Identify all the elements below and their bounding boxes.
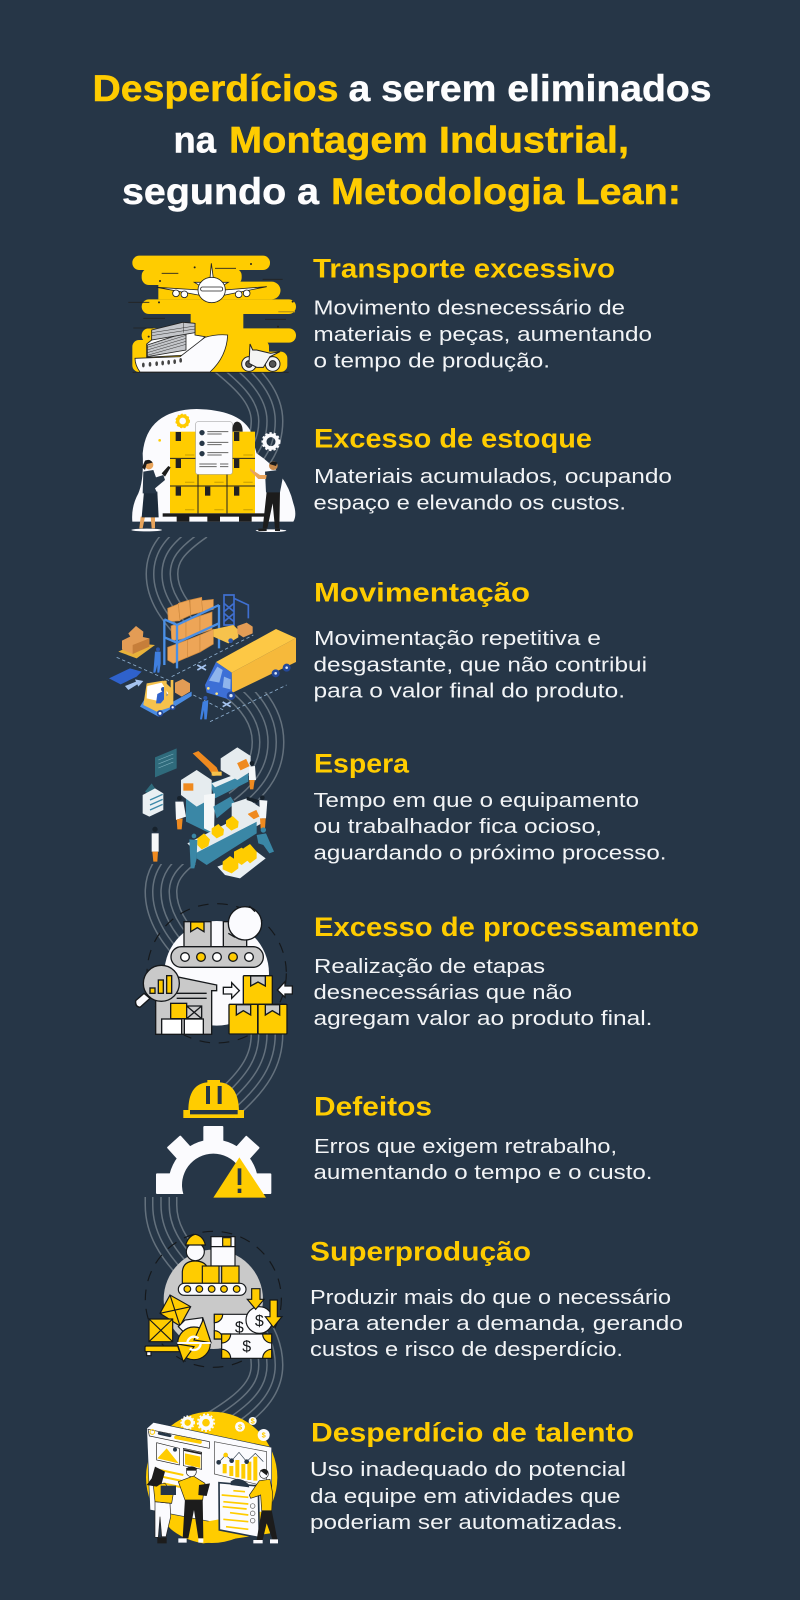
description: custos e risco de desperdício. [310,1338,623,1361]
woman [155,1502,171,1537]
icon: worker, conveyor, crates and money: $ [242,1339,251,1356]
title: segundo a [122,171,319,212]
worker 2 [200,700,208,719]
pallet [163,513,265,517]
description: Uso inadequado do potencial [310,1458,626,1481]
man [250,461,286,532]
description: Movimentação repetitiva e [314,627,601,650]
panel: Superprodução [145,1231,683,1367]
motorcycle [242,344,280,371]
heading: Superprodução [310,1236,531,1266]
title: Metodologia Lean: [331,171,681,212]
description: materiais e peças, aumentando [314,323,652,346]
title: a serem eliminados [348,68,712,109]
infographic canvas [94,74,710,1544]
gears [178,416,188,426]
tall forklift [224,595,248,625]
description [314,1135,652,1184]
title [92,68,712,212]
panel: Movimentação [109,578,647,722]
icon: stacked boxes, checklist and two workers [131,409,295,532]
heading: Espera [314,748,410,778]
icon: helmet, gear and warning triangle [156,1080,271,1198]
description [314,465,672,514]
panel: Espera [143,747,666,878]
panel: Desperdício de talento [146,1412,634,1543]
recycle arrows [177,1319,211,1362]
woman [131,460,171,531]
left machine [186,795,210,833]
description: poderiam ser automatizadas. [310,1511,623,1534]
clipboard [219,1483,259,1538]
clipboard [196,422,232,474]
panel: Transporte excessivo [128,254,652,372]
icon: warehouse with shelves, truck and forklift [109,595,296,722]
heading: Excesso de processamento [314,912,699,942]
icon: production line with workers and yellow cubes [143,747,274,878]
blue platform [109,668,142,684]
description [314,627,647,702]
title: Montagem Industrial, [229,120,629,160]
cart [217,852,266,878]
description: Erros que exigem retrabalho, [314,1135,617,1158]
ship [135,322,228,372]
workers [152,761,274,868]
description [314,955,652,1030]
curved ribbon connectors [161,352,268,1436]
icon: worker, conveyor, crates and money [145,1231,282,1367]
panel: Excesso de estoque [131,409,672,532]
middle [204,793,215,833]
description: Produzir mais do que o necessário [310,1286,671,1309]
worker [153,652,161,673]
title: Desperdícios [92,68,338,109]
description [314,296,652,372]
man [183,1498,203,1538]
icon: conveyor, factory, magnifier and boxes [136,904,292,1043]
description: Realização de etapas [314,955,545,978]
icon: team in front of dashboard [146,1412,278,1543]
description: aguardando o próximo processo. [314,842,666,864]
description [314,789,666,864]
description: aumentando o tempo e o custo. [314,1161,652,1184]
description: o tempo de produção. [314,350,550,372]
description: da equipe em atividades que [310,1485,620,1508]
description: ou trabalhador fica ocioso, [314,815,602,838]
heading: Excesso de estoque [314,424,592,454]
pile [118,643,155,658]
icon: plane, ship and motorcycle on yellow cloud [128,256,296,372]
description [310,1286,683,1361]
description: agregam valor ao produto final. [314,1007,652,1030]
icon: team in front of dashboard: $ [238,1422,242,1431]
panel: Excesso de processamento [136,904,699,1043]
description: Tempo em que o equipamento [314,789,639,812]
man right [257,1510,277,1540]
lower belt [197,822,257,865]
description: Materiais acumulados, ocupando [314,465,672,488]
heading: Desperdício de talento [311,1418,634,1448]
forklift [140,692,192,717]
panel: Defeitos [156,1080,652,1198]
shelf boxes [168,597,213,663]
title: na [174,120,216,160]
gears and coins [181,1414,214,1431]
heading: Defeitos [314,1092,432,1122]
upper machine [210,770,248,798]
icon: worker, conveyor, crates and money: $ [235,1319,244,1336]
description: espaço e elevando os custos. [314,492,626,514]
icon: team in front of dashboard: $ [251,1417,255,1426]
description [310,1458,626,1534]
description: desnecessárias que não [314,981,572,1004]
dashboard [147,1422,272,1533]
description: Movimento desnecessário de [314,296,625,320]
description: desgastante, que não contribui [314,654,647,676]
heading: Movimentação [314,578,530,608]
icon: team in front of dashboard: $ [262,1431,266,1440]
icon: worker, conveyor, crates and money: $ [255,1313,264,1330]
truck [216,629,296,673]
description: para atender a demanda, gerando [310,1312,683,1335]
heading: Transporte excessivo [313,254,615,284]
description: para o valor final do produto. [314,680,625,702]
plane [157,263,267,303]
